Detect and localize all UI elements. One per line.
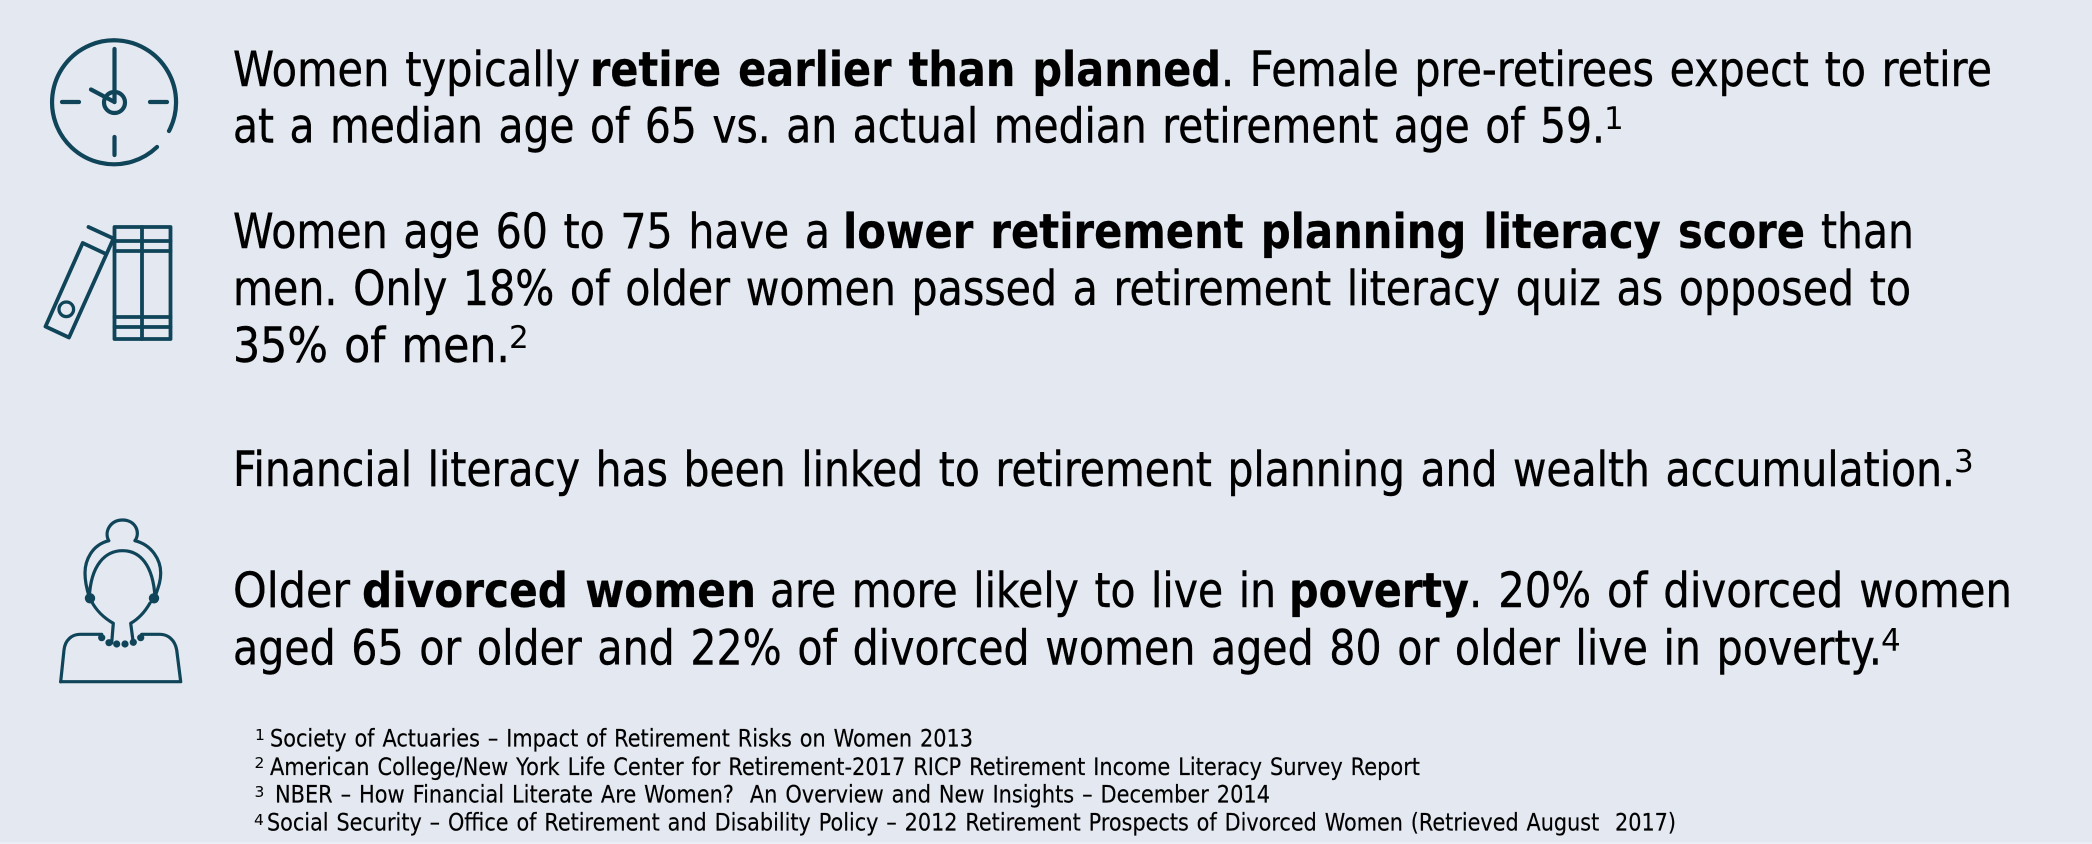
- text: divorced women poverty: poverty: [1289, 563, 1469, 619]
- text: retire earlier than planned: [233, 42, 1992, 154]
- text: retire earlier than planned: retire earlier than planned: [590, 42, 1221, 98]
- text: divorced women poverty: 4: [1881, 623, 1901, 659]
- text: divorced women poverty: Older: [233, 563, 350, 619]
- text: retirement planning literacy: Women age 60 to 75 have a: [233, 204, 830, 260]
- text: divorced women poverty: are more likely to live in: [770, 563, 1276, 619]
- footnotes: NBER – How Financial Literate Are Women? An Overview and New Insights – December 2014: [275, 780, 1270, 808]
- text: retirement planning literacy: 35% of men.: [233, 318, 510, 374]
- footnotes: Social Security – Office of Retirement and Disability Policy – 2012 Retirement Prospects of Divorced Women (Retrieved August 2017): [267, 808, 1676, 836]
- text: retire earlier than planned: at a median age of 65 vs. an actual median retirement age of 59.: [233, 98, 1605, 154]
- text: divorced women poverty: . 20% of divorced women: [1469, 563, 2012, 619]
- text: retirement planning literacy: than: [1821, 204, 1914, 260]
- footnotes: 3: [254, 783, 264, 801]
- text: retire earlier than planned: 1: [1604, 101, 1624, 137]
- text: divorced women poverty: [233, 563, 2012, 676]
- text: retirement planning literacy: 2: [509, 320, 529, 356]
- icon: clock: [52, 40, 176, 164]
- footnotes: Society of Actuaries – Impact of Retirement Risks on Women 2013: [270, 724, 973, 752]
- text: financial literacy: 3: [1954, 444, 1974, 480]
- text: divorced women poverty: divorced women: [362, 563, 756, 619]
- text: retire earlier than planned: Women typically: [233, 42, 580, 98]
- text: retirement planning literacy: lower retirement planning literacy score: [843, 204, 1805, 260]
- icon: books: [46, 227, 170, 339]
- footnotes: 1: [255, 726, 265, 744]
- footnotes: American College/New York Life Center for Retirement-2017 RICP Retirement Income Literacy Survey Report: [270, 753, 1420, 781]
- text: retirement planning literacy: [233, 204, 1914, 374]
- footnotes: [254, 724, 1676, 836]
- icon: older woman: [61, 520, 181, 682]
- footnotes: 2: [254, 754, 264, 772]
- footnotes: 4: [254, 811, 264, 829]
